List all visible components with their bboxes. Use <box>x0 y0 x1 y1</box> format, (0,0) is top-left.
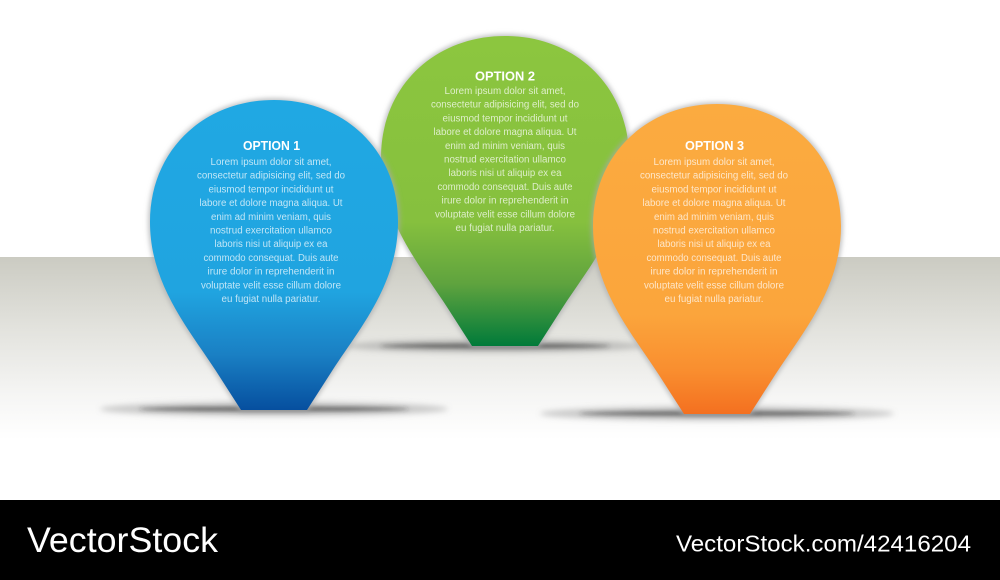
text block: option 1 <box>197 157 345 305</box>
text block: option 1: enim ad minim veniam, quis <box>211 212 331 223</box>
text block: option 2 <box>431 86 579 234</box>
text block: option 1: laboris nisi ut aliquip ex ea <box>214 239 328 250</box>
pin: option 1 <box>150 100 398 410</box>
text block: option 1: Lorem ipsum dolor sit amet, <box>210 157 332 168</box>
text block: option 3: eiusmod tempor incididunt ut <box>652 184 777 195</box>
text block: option 2: eiusmod tempor incididunt ut <box>442 113 568 124</box>
text block: option 3: irure dolor in reprehenderit in <box>650 267 778 278</box>
text block: option 3: voluptate velit esse cillum dolore <box>644 280 784 291</box>
footer logo text: VectorStock <box>27 521 219 560</box>
text block: option 2: nostrud exercitation ullamco <box>444 154 566 166</box>
text block: option 2: laboris nisi ut aliquip ex ea <box>448 168 562 179</box>
text block: option 2: commodo consequat. Duis aute <box>438 182 573 193</box>
text block: option 1: labore et dolore magna aliqua. Ut <box>200 198 343 209</box>
text block: option 2: labore et dolore magna aliqua. Ut <box>434 127 577 138</box>
text block: option 3: labore et dolore magna aliqua. Ut <box>642 198 786 209</box>
text block: option 1: eiusmod tempor incididunt ut <box>208 184 334 195</box>
text block: option 3: eu fugiat nulla pariatur. <box>664 294 764 305</box>
text block: option 3: commodo consequat. Duis aute <box>646 253 782 264</box>
text block: option 3: Lorem ipsum dolor sit amet, <box>654 157 774 168</box>
shadow: pin 3 <box>540 406 894 421</box>
pin: option 3 <box>593 104 841 414</box>
floor background <box>0 257 1000 440</box>
text block: option 3: nostrud exercitation ullamco <box>653 226 775 236</box>
text block: option 3: laboris nisi ut aliquip ex ea <box>658 239 771 250</box>
heading: option 2: OPTION 2 <box>475 70 535 84</box>
text block: option 2: enim ad minim veniam, quis <box>445 141 565 152</box>
shadow: pin 2 <box>345 339 645 353</box>
text block: option 3 <box>640 157 788 305</box>
text block: option 1: nostrud exercitation ullamco <box>210 226 332 236</box>
shadow: pin 1 <box>100 402 448 416</box>
text block: option 2: irure dolor in reprehenderit in <box>442 196 568 207</box>
pin: option 2 <box>381 36 629 346</box>
text block: option 1: consectetur adipisicing elit, sed do <box>197 171 345 182</box>
heading: option 3: OPTION 3 <box>685 139 744 153</box>
text block: option 2: eu fugiat nulla pariatur. <box>456 223 554 234</box>
text block: option 2: consectetur adipisicing elit, sed do <box>431 100 579 111</box>
text block: option 1: eu fugiat nulla pariatur. <box>222 294 320 305</box>
text block: option 1: commodo consequat. Duis aute <box>204 253 339 264</box>
heading: option 1: OPTION 1 <box>243 139 300 153</box>
text block: option 2: Lorem ipsum dolor sit amet, <box>444 86 566 97</box>
footer bar <box>0 500 1000 580</box>
text block: option 2: voluptate velit esse cillum dolore <box>435 209 575 220</box>
text block: option 1: irure dolor in reprehenderit in <box>208 267 334 278</box>
text block: option 3: enim ad minim veniam, quis <box>654 212 774 223</box>
text block: option 1: voluptate velit esse cillum dolore <box>201 280 341 291</box>
text block: option 3: consectetur adipisicing elit, sed do <box>640 171 788 182</box>
footer url text: VectorStock.com/42416204 <box>676 530 971 556</box>
